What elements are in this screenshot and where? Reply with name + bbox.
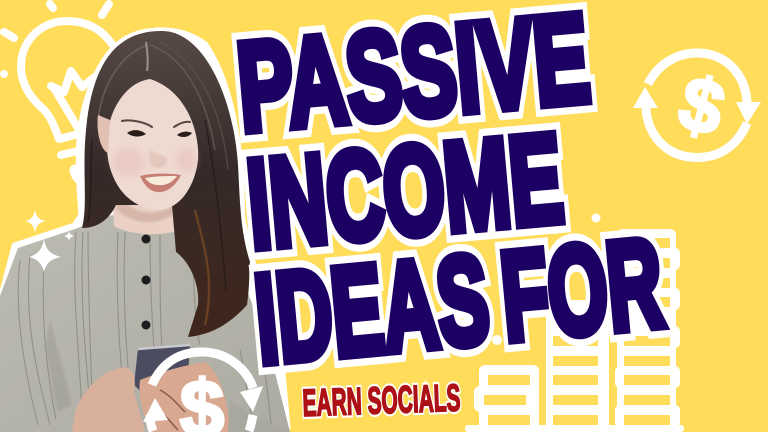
title line: IDEAS FOR: IDEAS FOR	[250, 213, 669, 391]
decorative dots	[492, 210, 600, 345]
sleeve shadow	[46, 320, 72, 412]
sparkles	[25, 209, 74, 272]
icon: dollar cycle top right	[633, 53, 761, 158]
phone	[134, 345, 190, 400]
sleeve cuff right	[228, 400, 290, 432]
icon: dollar cycle bottom	[143, 352, 263, 432]
hands	[72, 367, 145, 432]
buttons	[142, 234, 150, 330]
brand: EARN SOCIALS: EARN SOCIALS	[302, 377, 461, 425]
eyes	[127, 130, 192, 137]
title line: IDEAS FOR: IDEAS FOR	[250, 213, 669, 391]
brows	[122, 120, 190, 127]
icon: dollar cycle top right: $	[670, 60, 733, 153]
icon: coin stacks	[465, 229, 684, 432]
brand: EARN SOCIALS: EARN SOCIALS	[302, 377, 461, 425]
title	[232, 0, 669, 391]
face	[107, 79, 198, 210]
person outline	[3, 31, 287, 428]
coin stack right	[615, 229, 680, 432]
right hand	[139, 362, 230, 432]
nose shadow	[149, 150, 167, 168]
person photo	[0, 31, 290, 432]
coin stack left	[474, 365, 539, 432]
neck shadow	[116, 195, 178, 222]
finger shadows	[158, 390, 185, 430]
shirt stripes	[18, 232, 272, 432]
title line: INCOME: INCOME	[242, 108, 568, 275]
hair	[82, 31, 250, 337]
phone top edge	[138, 345, 190, 349]
coin stack middle	[546, 300, 609, 432]
mouth	[140, 174, 181, 192]
hair strands	[88, 42, 228, 325]
icon: light bulb	[4, 4, 112, 182]
title line: INCOME: INCOME	[242, 108, 568, 275]
shirt	[0, 215, 290, 432]
cheek blush	[112, 148, 144, 176]
neck	[112, 190, 180, 234]
hair parting	[146, 42, 148, 71]
ear	[97, 115, 110, 153]
